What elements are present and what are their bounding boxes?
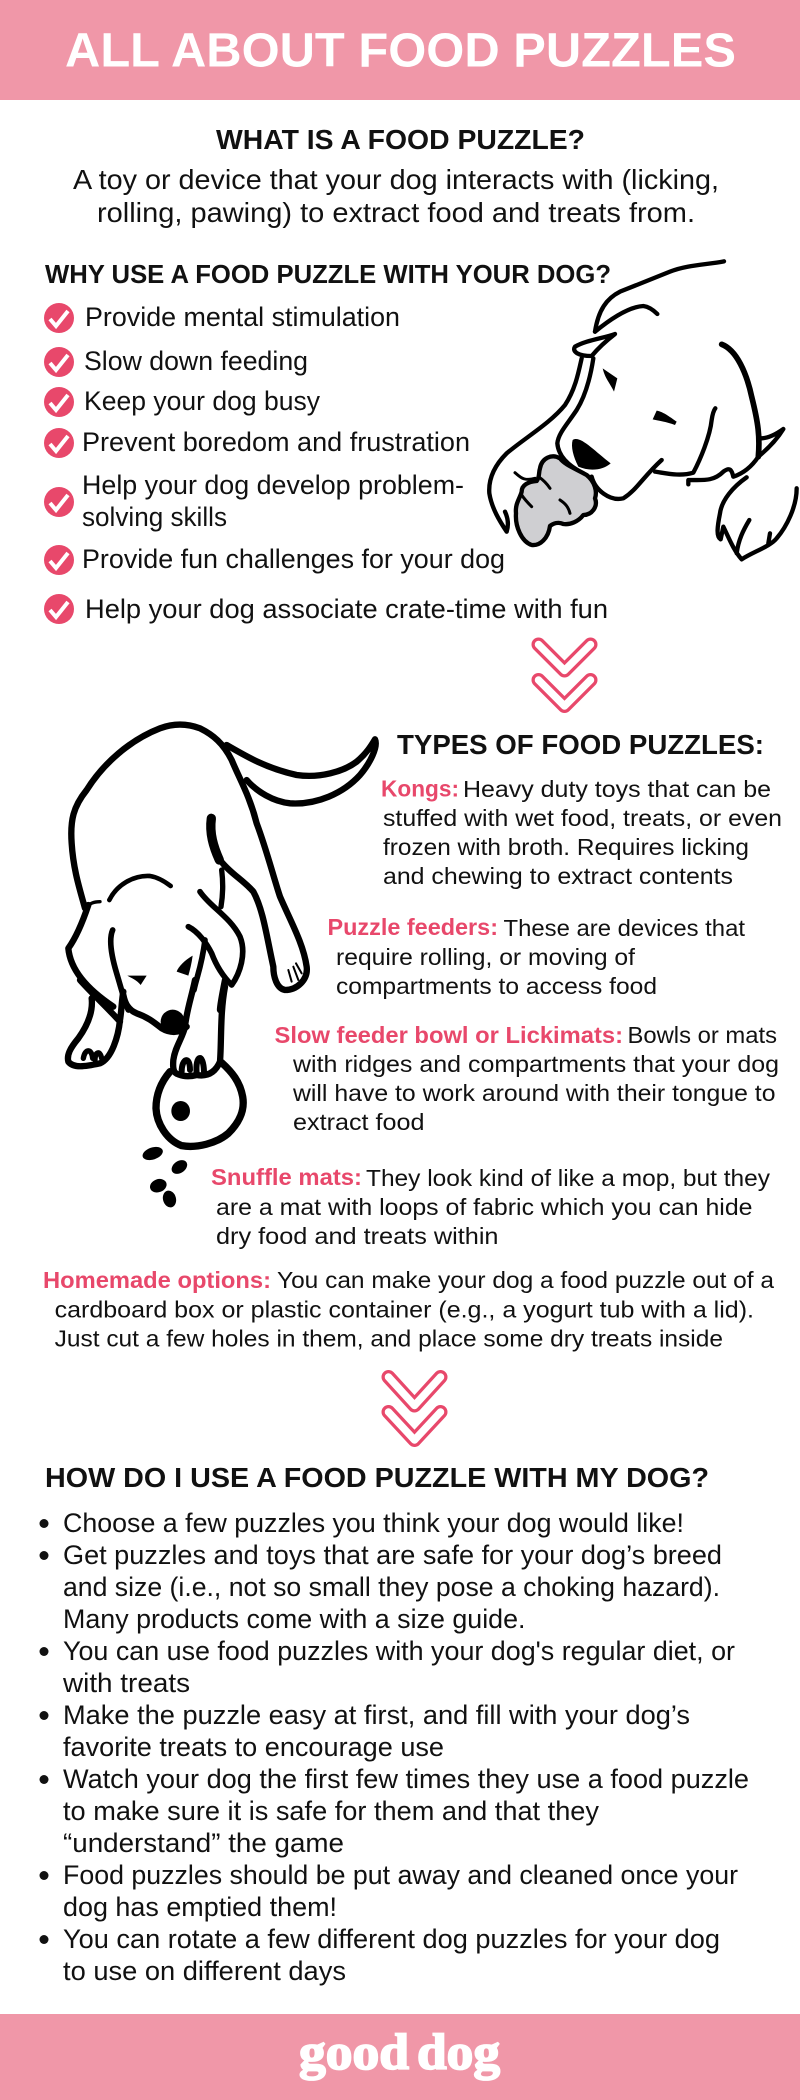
logo: good dog: dog <box>417 2025 500 2081</box>
checklist item 5 <box>44 470 464 532</box>
type: kongs: Heavy duty toys that can be <box>463 776 771 802</box>
illustration: dog licking toy <box>489 261 797 559</box>
type: homemade options: You can make your dog a food puzzle out of a <box>277 1267 775 1293</box>
bullet list: Many products come with a size guide. <box>63 1604 526 1634</box>
bullet list <box>40 1508 749 1986</box>
type: homemade options: Just cut a few holes in them, and place some dry treats inside <box>55 1326 723 1352</box>
type: homemade options <box>43 1267 775 1352</box>
checklist item 1: Provide mental stimulation <box>85 302 400 332</box>
type: kongs: and chewing to extract contents <box>383 863 733 889</box>
type: snuffle mats: dry food and treats within <box>216 1223 498 1249</box>
checklist item 6: Provide fun challenges for your dog <box>82 544 505 574</box>
checklist item 4: Prevent boredom and frustration <box>82 427 470 457</box>
type: slow feeder bowl or lickimats: Bowls or mats <box>628 1022 777 1048</box>
definition text <box>73 164 719 228</box>
type: slow feeder bowl or lickimats: Slow feeder bowl or Lickimats: <box>274 1022 623 1048</box>
type: puzzle feeders: require rolling, or moving of <box>336 944 635 970</box>
type: slow feeder bowl or lickimats: will have to work around with their tongue to <box>292 1080 776 1106</box>
type: kongs: frozen with broth. Requires licking <box>383 834 749 860</box>
definition text: A toy or device that your dog interacts with (licking, <box>73 164 719 195</box>
checklist item 5: Help your dog develop problem- <box>82 470 464 500</box>
arrow: chevrons down 1 <box>538 644 590 706</box>
type: slow feeder bowl or lickimats: with ridges and compartments that your dog <box>292 1051 779 1077</box>
bullet list: to make sure it is safe for them and that they <box>63 1796 600 1826</box>
bullet list: dog has emptied them! <box>63 1892 337 1922</box>
heading: why use: WHY USE A FOOD PUZZLE WITH YOUR DOG? <box>45 261 611 289</box>
footer banner <box>0 2014 800 2100</box>
kibble <box>141 1145 190 1209</box>
bullet list: to use on different days <box>63 1956 346 1986</box>
bullet list: Watch your dog the first few times they use a food puzzle <box>63 1764 749 1794</box>
type: slow feeder bowl or lickimats: extract food <box>293 1109 424 1135</box>
type: kongs <box>381 776 782 889</box>
type: kongs: stuffed with wet food, treats, or even <box>383 805 782 831</box>
type: slow feeder bowl or lickimats <box>274 1022 779 1135</box>
bullet list: Food puzzles should be put away and cleaned once your <box>63 1860 738 1890</box>
bullet list: favorite treats to encourage use <box>63 1732 444 1762</box>
checklist item 7: Help your dog associate crate-time with fun <box>85 594 608 624</box>
type: homemade options: Homemade options: <box>43 1267 271 1293</box>
type: snuffle mats: Snuffle mats: <box>211 1164 362 1190</box>
bullet list: “understand” the game <box>63 1828 344 1858</box>
section: types of food puzzles <box>43 729 782 1352</box>
bullet list: Choose a few puzzles you think your dog would like! <box>63 1508 684 1538</box>
dog nose <box>161 1010 185 1034</box>
section: what is a food puzzle <box>73 124 719 228</box>
type: homemade options: cardboard box or plastic container (e.g., a yogurt tub with a lid). <box>55 1296 754 1322</box>
type: puzzle feeders: These are devices that <box>504 915 745 941</box>
type: kongs: Kongs: <box>381 776 459 802</box>
illustration: dog pawing ball <box>68 725 376 1209</box>
checklist item 5: solving skills <box>82 502 227 532</box>
title banner <box>0 0 800 100</box>
section: why use a food puzzle <box>44 261 611 624</box>
checklist item 2: Slow down feeding <box>84 346 308 376</box>
bullet list: with treats <box>62 1668 190 1698</box>
type: snuffle mats: They look kind of like a mop, but they <box>366 1165 770 1191</box>
definition text: rolling, pawing) to extract food and treats from. <box>97 197 695 228</box>
heading: types: TYPES OF FOOD PUZZLES: <box>397 729 764 760</box>
title: ALL ABOUT FOOD PUZZLES <box>65 24 736 78</box>
bullet list: Get puzzles and toys that are safe for your dog’s breed <box>63 1540 722 1570</box>
section: how do I use a food puzzle <box>40 1462 749 1986</box>
grey toy <box>515 456 596 545</box>
heading: how to use: HOW DO I USE A FOOD PUZZLE WITH MY DOG? <box>45 1462 709 1493</box>
arrow: chevrons down 2 <box>388 1377 440 1440</box>
bullet list: You can use food puzzles with your dog's regular diet, or <box>63 1636 735 1666</box>
bullet list: You can rotate a few different dog puzzles for your dog <box>63 1924 720 1954</box>
type: puzzle feeders: compartments to access food <box>336 973 657 999</box>
type: puzzle feeders: Puzzle feeders: <box>328 914 498 940</box>
logo: good dog: good <box>299 2025 409 2081</box>
checklist item 3: Keep your dog busy <box>84 386 320 416</box>
type: snuffle mats <box>211 1164 770 1249</box>
nose and eyes <box>572 368 677 470</box>
heading: what is a food puzzle: WHAT IS A FOOD PUZZLE? <box>216 124 585 155</box>
ball hole <box>171 1101 190 1121</box>
type: snuffle mats: are a mat with loops of fabric which you can hide <box>216 1194 752 1220</box>
logo: good dog <box>299 2025 500 2081</box>
bullet list: and size (i.e., not so small they pose a choking hazard). <box>63 1572 720 1602</box>
bullet list: Make the puzzle easy at first, and fill with your dog’s <box>63 1700 690 1730</box>
type: puzzle feeders <box>328 914 745 999</box>
